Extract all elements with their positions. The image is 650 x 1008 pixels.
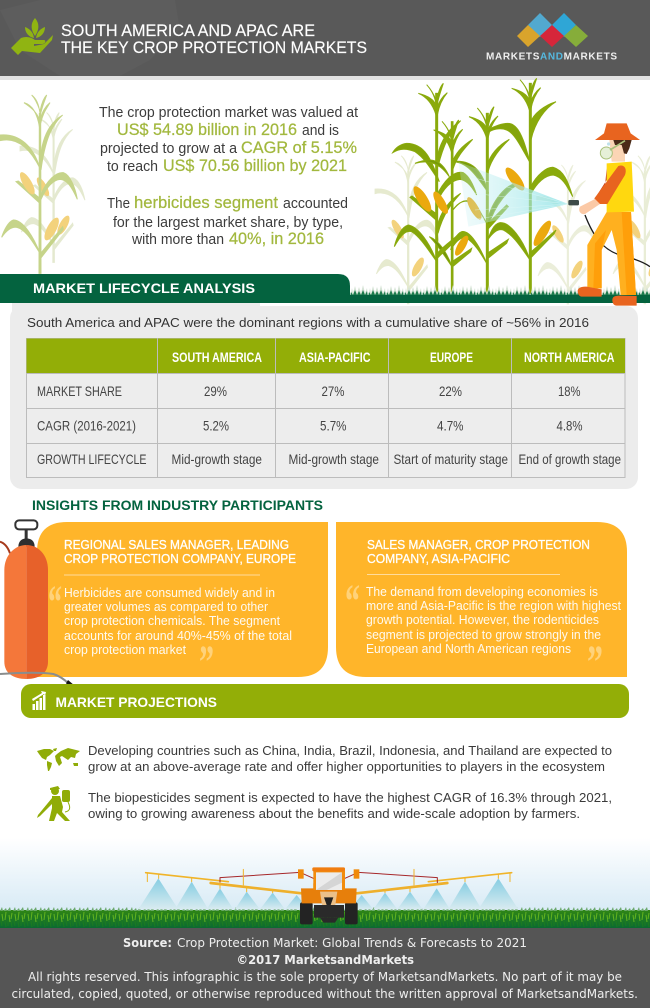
quote card: Europe: accounts for around 40%-45% of the total [64, 629, 292, 643]
illustration: tractor spraying field [138, 867, 518, 924]
table: regional comparison: NORTH AMERICA [524, 350, 614, 366]
illustration: field sky [0, 838, 650, 912]
icon: growth bars [32, 691, 46, 710]
farmer [568, 123, 650, 306]
table: regional comparison [26, 338, 625, 478]
intro text: projected to grow at a [100, 141, 238, 157]
text: biopesticides: owing to growing awareness about the benefits and wide-scale adoption by farmers. [88, 806, 580, 821]
icon: person spraying [37, 786, 70, 821]
quote card: Europe: crop protection market [64, 643, 186, 657]
section header: market lifecycle analysis [0, 274, 350, 303]
icon: world map [37, 748, 80, 771]
table: regional comparison: ASIA-PACIFIC [299, 350, 370, 366]
illustration: faded corn plants, left [0, 95, 85, 273]
footer: circulated, copied, quoted, or otherwise reproduced without the written approval of MarketsandMarkets. [12, 986, 638, 1001]
table: regional comparison: End of growth stage [518, 452, 621, 467]
quote card: Europe [37, 522, 328, 689]
quote card: Asia-Pacific [336, 522, 627, 689]
intro text: The crop protection market was valued at [99, 105, 358, 121]
title [61, 21, 367, 57]
intro text [99, 105, 358, 248]
quote card: Europe: CROP PROTECTION COMPANY, EUROPE [64, 551, 296, 566]
table: regional comparison: 4.7% [437, 418, 464, 434]
table: regional comparison: 29% [204, 384, 227, 399]
table: regional comparison: Mid-growth stage [172, 452, 262, 467]
title: THE KEY CROP PROTECTION MARKETS [61, 38, 367, 57]
section header: market projections: MARKET PROJECTIONS [56, 695, 217, 710]
quote card: Europe: ” [199, 636, 214, 689]
quote card: Asia-Pacific: ” [587, 636, 603, 689]
quote card: Asia-Pacific: The demand from developing economies is [366, 585, 598, 599]
footer: Source: [123, 935, 172, 950]
intro text: and is [302, 123, 339, 139]
quote card: Asia-Pacific: COMPANY, ASIA-PACIFIC [367, 551, 510, 566]
text: developing countries [88, 743, 612, 774]
intro text: to reach [107, 159, 158, 175]
title: SOUTH AMERICA AND APAC ARE [61, 21, 315, 40]
heading: insights: INSIGHTS FROM INDUSTRY PARTICIPANTS [32, 498, 323, 514]
footer [0, 928, 650, 1008]
table: regional comparison: SOUTH AMERICA [172, 350, 262, 366]
intro text: CAGR of 5.15% [241, 138, 357, 157]
quote card: Europe: Herbicides are consumed widely and in [64, 586, 275, 600]
panel heading: South America and APAC were the dominant regions with a cumulative share of ~56% in 2016 [27, 315, 589, 330]
quote card: Europe: greater volumes as compared to other [64, 600, 268, 614]
footer: Crop Protection Market: Global Trends & Forecasts to 2021 [177, 935, 527, 950]
table: regional comparison: 18% [558, 384, 580, 399]
table: regional comparison: Mid-growth stage [288, 452, 379, 467]
quote card: Asia-Pacific: segment is projected to grow strongly in the [366, 628, 601, 642]
quote card: Asia-Pacific: more and Asia-Pacific is the region with highest [366, 599, 621, 613]
logo: MarketsandMarkets [486, 13, 617, 62]
text: biopesticides: The biopesticides segment is expected to have the highest CAGR of 16.3% through 2021, [88, 790, 612, 805]
table: regional comparison: 4.8% [556, 418, 582, 434]
intro text: with more than [131, 232, 224, 248]
quote card: Europe: REGIONAL SALES MANAGER, LEADING [64, 537, 289, 552]
quote card: Asia-Pacific: growth potential. However, the rodenticides [366, 613, 599, 627]
tractor [300, 902, 313, 924]
section header: market projections [21, 684, 629, 718]
ground grass [350, 285, 650, 303]
table: regional comparison: 5.7% [320, 418, 346, 434]
table: regional comparison: Start of maturity stage [394, 452, 508, 467]
table: regional comparison: 22% [439, 384, 462, 399]
table: regional comparison: 27% [322, 384, 344, 399]
gray panel: market lifecycle [0, 274, 638, 489]
text: biopesticides [88, 790, 612, 821]
table: regional comparison: 5.2% [203, 418, 229, 434]
intro text: accounted [283, 196, 348, 212]
quote card: Asia-Pacific: European and North American regions [366, 642, 571, 656]
booms [146, 869, 512, 893]
footer: All rights reserved. This infographic is the sole property of MarketsandMarkets. No part of it may be [28, 969, 622, 984]
quote card: Asia-Pacific: “ [345, 575, 360, 628]
quote card: Asia-Pacific: SALES MANAGER, CROP PROTECTION [367, 537, 590, 552]
footer: ©2017 MarketsandMarkets [236, 952, 414, 967]
table: regional comparison: CAGR (2016-2021) [37, 418, 136, 434]
icon: hand holding sprout [11, 18, 53, 55]
intro text: herbicides segment [134, 193, 278, 212]
intro text: US$ 54.89 billion in 2016 [117, 120, 297, 139]
logo: MarketsandMarkets: MARKETSANDMARKETS [486, 52, 617, 62]
ground: green crop strip [0, 907, 650, 928]
section header: market lifecycle analysis: MARKET LIFECYCLE ANALYSIS [33, 281, 255, 296]
corn plants with spray [375, 78, 650, 304]
text: developing countries: grow at an above-average rate and offer higher opportunities to players in the ecosystem [88, 759, 605, 774]
illustration: farmer spraying corn [350, 78, 650, 306]
text: developing countries: Developing countries such as China, India, Brazil, Indonesia, and Thailand are expected to [88, 743, 612, 758]
intro text: for the largest market share, by type, [113, 215, 343, 231]
intro text: 40%, in 2016 [229, 229, 324, 248]
table: regional comparison: EUROPE [430, 350, 473, 366]
illustration: orange spray tank [0, 520, 77, 689]
intro text: US$ 70.56 billion by 2021 [163, 156, 347, 175]
quote card: Europe: “ [48, 576, 62, 629]
intro text: The [107, 196, 130, 212]
table: regional comparison: GROWTH LIFECYCLE [37, 452, 146, 467]
table: regional comparison: MARKET SHARE [37, 384, 122, 399]
quote card: Europe: crop protection chemicals. The segment [64, 614, 280, 628]
spray cones [138, 878, 518, 909]
header banner [0, 0, 650, 80]
